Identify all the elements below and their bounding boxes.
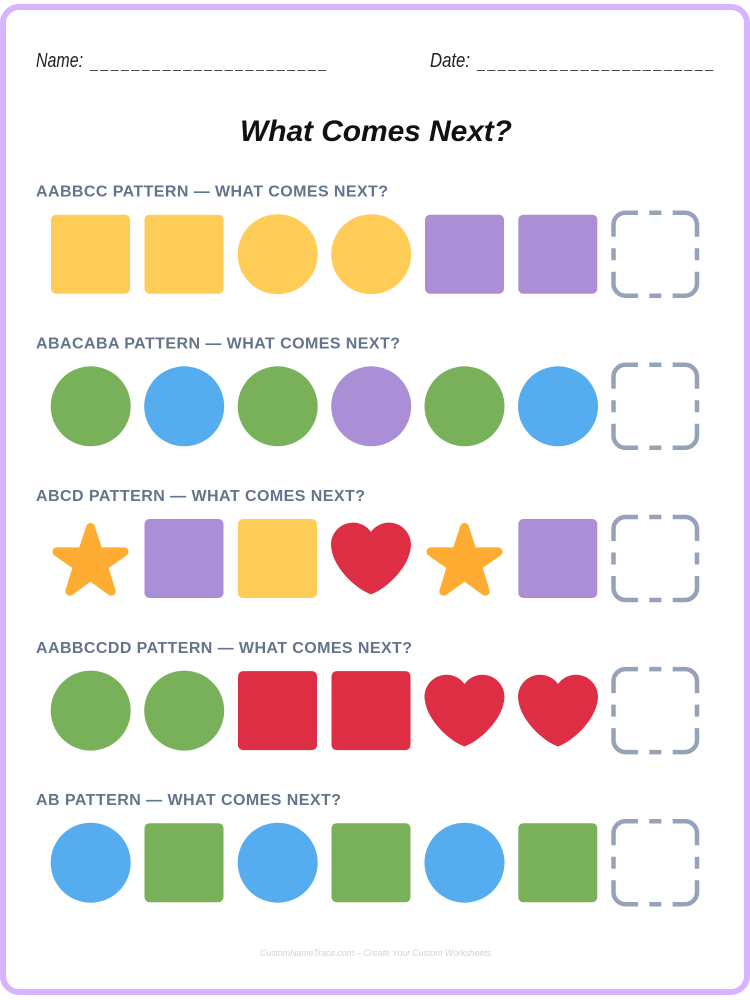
date field: Date: <box>430 50 470 72</box>
row 2: ABACABA pattern <box>51 365 697 448</box>
heading: row 5: AB PATTERN — WHAT COMES NEXT? <box>36 792 341 809</box>
heading: row 4: AABBCCDD PATTERN — WHAT COMES NEXT? <box>36 640 412 657</box>
row 5: AB pattern <box>51 821 697 904</box>
name field <box>36 50 326 72</box>
title: What Comes Next? <box>240 115 512 148</box>
name field: _______________________ <box>89 55 326 71</box>
heading: row 1: AABBCC PATTERN — WHAT COMES NEXT? <box>36 184 388 200</box>
footer: CustomNameTrace.com – Create Your Custom Worksheets <box>260 948 492 958</box>
date field <box>430 50 713 72</box>
heading: row 3: ABCD PATTERN — WHAT COMES NEXT? <box>36 488 365 505</box>
heading: row 2: ABACABA PATTERN — WHAT COMES NEXT? <box>36 336 400 352</box>
name field: Name: <box>36 50 83 72</box>
row 3: ABCD pattern <box>52 517 697 600</box>
date field: _______________________ <box>476 55 713 71</box>
row 4: AABBCCDD pattern <box>51 669 697 752</box>
row 1: AABBCC pattern <box>51 213 697 296</box>
